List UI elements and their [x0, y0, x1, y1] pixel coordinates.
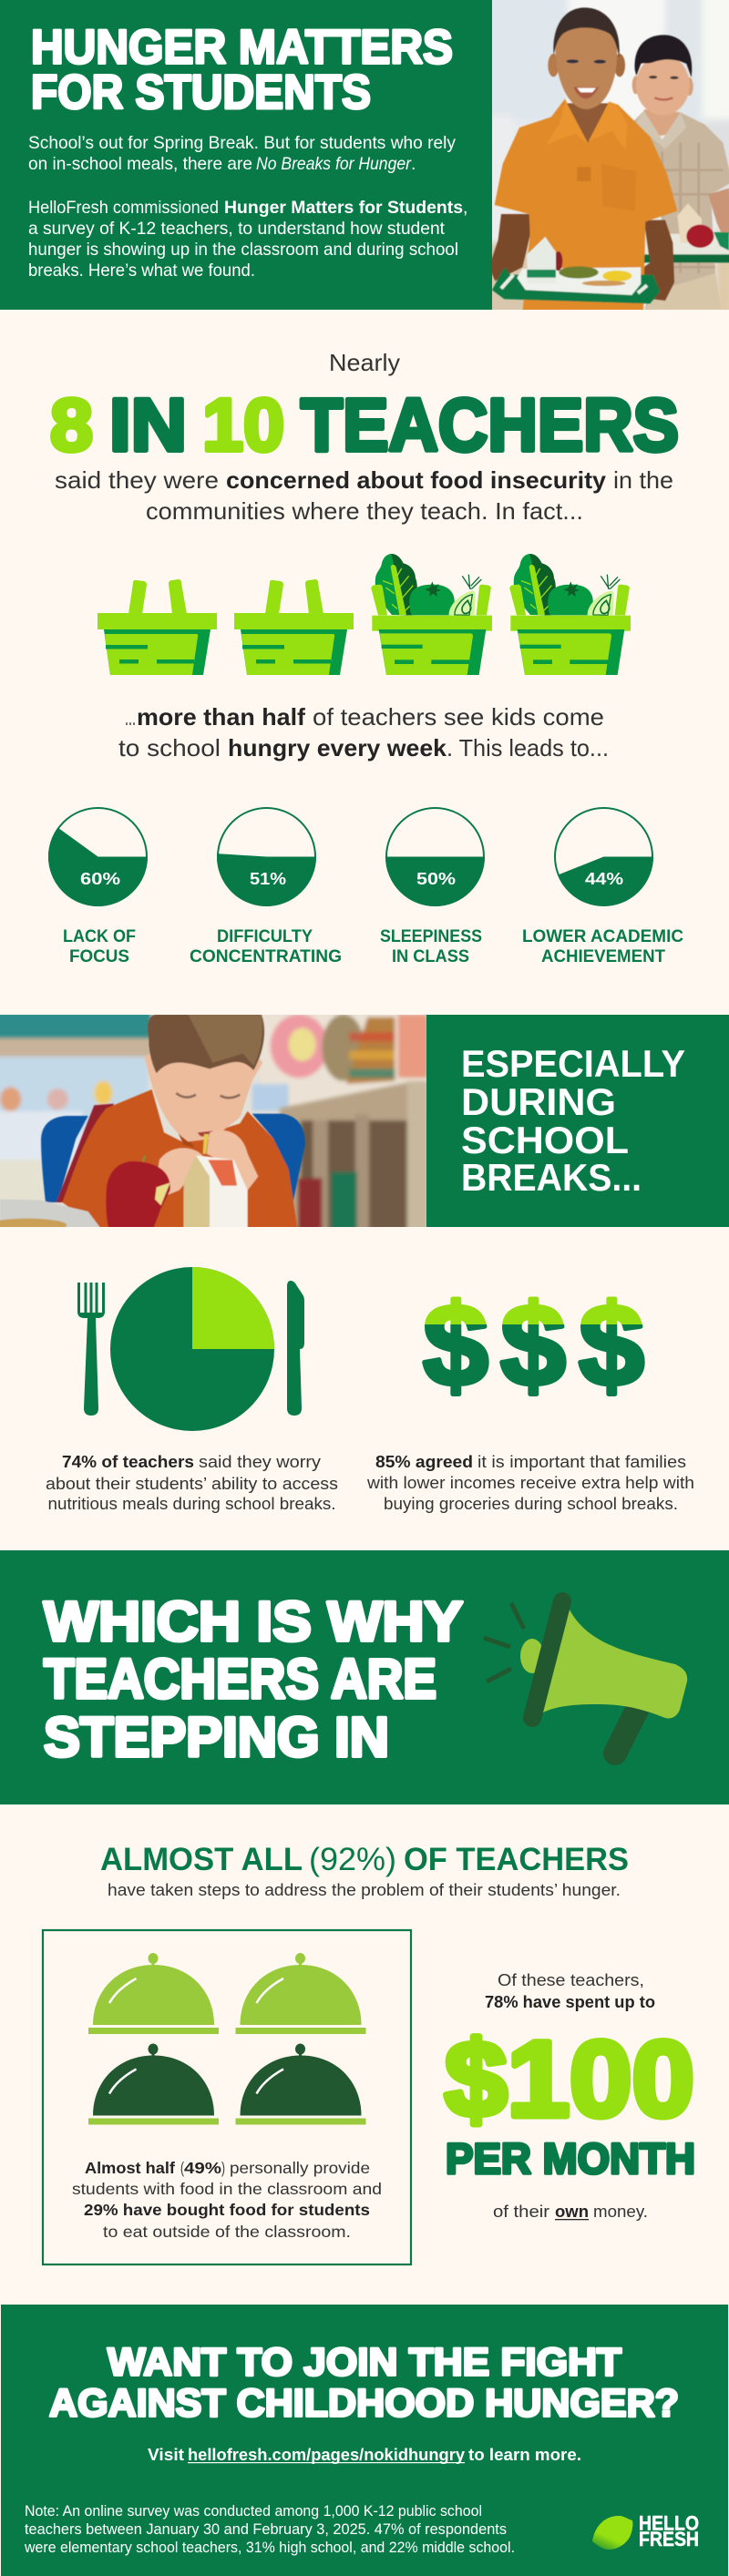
Nearly: Nearly: [329, 349, 400, 376]
survey note: were elementary school teachers, 31% high school, and 22% middle school.: [24, 2540, 515, 2556]
concern sentence: said they were: [55, 466, 219, 494]
icon: three dollar signs: $: [500, 1281, 566, 1411]
pie: 60 percent lack of focus: 60%: [80, 870, 120, 888]
icon: three dollar signs: $: [579, 1281, 644, 1411]
intro paragraph 2: Hunger Matters for Students: [224, 198, 463, 218]
survey note: Note: An online survey was conducted among 1,000 K-12 public school: [25, 2503, 482, 2520]
pie: 44 percent lower academic achievement: LOWER ACADEMIC: [522, 927, 683, 946]
heading: almost all 92 percent of teachers: [100, 1842, 629, 1899]
text: of these teachers: Of these teachers,: [498, 1971, 644, 1989]
heading: STEPPING IN: [44, 1706, 389, 1768]
concern sentence: communities where they teach. In fact...: [146, 497, 583, 525]
intro paragraph 2: breaks. Here’s what we found.: [28, 261, 255, 281]
visit link: to learn more.: [468, 2445, 581, 2464]
heading: almost all 92 percent of teachers: (92%): [309, 1842, 396, 1877]
pie: 44 percent lower academic achievement: ACHIEVEMENT: [541, 947, 665, 966]
photo: boy drinking milk with apple: [0, 1011, 437, 1232]
heading: TEACHERS ARE: [44, 1648, 436, 1710]
icon: empty basket 1: [98, 579, 217, 675]
heading: [44, 1590, 463, 1768]
text: almost half provide food: students with food in the classroom and: [72, 2180, 382, 2198]
knife: [287, 1281, 304, 1416]
text: 74 percent of teachers: said they worry: [199, 1453, 321, 1471]
intro paragraph 1: .: [411, 154, 416, 174]
pie: 60 percent lack of focus: [48, 808, 148, 966]
pie: 60 percent lack of focus: LACK OF: [63, 927, 136, 946]
icon: empty basket 2: [234, 579, 354, 675]
icon: dark cloche 4: [235, 2044, 366, 2124]
text: 85 percent agreed: with lower incomes receive extra help with: [366, 1474, 694, 1492]
big number: $100: [445, 2019, 694, 2140]
logo: HelloFresh: [592, 2512, 699, 2550]
icon: light cloche 1: [88, 1953, 219, 2034]
title: [31, 20, 453, 119]
pie: 51 percent difficulty concentrating: DIFFICULTY: [217, 927, 313, 946]
back boy: [631, 35, 729, 312]
fork: [77, 1283, 105, 1416]
icon: light cloche 2: [235, 1953, 366, 2034]
icon: three dollar signs: [423, 1281, 644, 1411]
intro paragraph 2: a survey of K-12 teachers, to understand how student: [28, 219, 446, 239]
heading: ESPECIALLY: [461, 1042, 685, 1085]
intro paragraph 1: School’s out for Spring Break. But for students who rely: [28, 133, 456, 153]
subheading: have taken steps to address the problem of their students’ hunger.: [108, 1880, 621, 1899]
pie: 44 percent lower academic achievement: 44%: [585, 870, 623, 888]
text: 74 percent of teachers: nutritious meals during school breaks.: [47, 1495, 335, 1513]
text: almost half provide food: Almost half: [85, 2159, 175, 2177]
heading: WANT TO JOIN THE FIGHT: [108, 2341, 621, 2385]
front boy: [489, 7, 677, 312]
text: almost half provide food: to eat outside of the classroom.: [103, 2223, 351, 2241]
pie: 50 percent sleepiness in class: IN CLASS: [392, 947, 469, 966]
text: 85 percent agreed: buying groceries during school breaks.: [384, 1495, 678, 1513]
text: 85 percent agreed: [366, 1453, 694, 1513]
heading: [49, 2341, 679, 2425]
visit link: [148, 2445, 581, 2464]
concern sentence: [55, 466, 673, 525]
heading: BREAKS...: [461, 1156, 642, 1199]
text: 85 percent agreed: 85% agreed: [375, 1453, 473, 1471]
heading: AGAINST CHILDHOOD HUNGER?: [49, 2381, 679, 2425]
hero green background: [0, 0, 492, 310]
big statistic: TEACHERS: [301, 384, 679, 466]
text: almost half provide food: personally provide: [230, 2159, 370, 2177]
more than half sentence: hungry every week: [228, 734, 447, 762]
panel: footer call to action: [1, 2305, 728, 2576]
wordmark: FRESH: [639, 2528, 699, 2550]
more than half sentence: of teachers see kids come: [313, 703, 604, 731]
intro paragraph 2: HelloFresh commissioned: [28, 198, 219, 218]
pie: 60 percent lack of focus: FOCUS: [69, 947, 129, 966]
big statistic: [50, 384, 679, 466]
concern sentence: in the: [613, 466, 673, 494]
big statistic: IN: [109, 384, 187, 466]
text: 85 percent agreed: it is important that families: [477, 1453, 686, 1471]
text: almost half provide food: 49%: [184, 2159, 222, 2177]
text: of their own money: [493, 2203, 648, 2221]
text: almost half provide food: (: [180, 2159, 184, 2177]
wordmark: HELLO: [639, 2512, 699, 2534]
more than half sentence: . This leads to...: [447, 734, 609, 762]
icon: full basket 4: [509, 554, 631, 675]
pie: 51 percent difficulty concentrating: [190, 808, 342, 966]
heading: SCHOOL: [461, 1119, 629, 1161]
visit link: Visit: [148, 2445, 184, 2464]
wordmark: [639, 2512, 699, 2550]
icon: dark cloche 3: [88, 2044, 219, 2124]
chart: four pie gauges: [48, 808, 683, 966]
pie: 50 percent sleepiness in class: [380, 808, 485, 966]
intro paragraph 1: [28, 133, 456, 174]
text: 74 percent of teachers: about their students’ ability to access: [46, 1475, 338, 1493]
more than half sentence: to school: [118, 734, 221, 762]
photo: two boys holding lunch trays: [483, 0, 729, 319]
text: almost half provide food: ): [221, 2159, 225, 2177]
intro paragraph 2: hunger is showing up in the classroom and during school: [28, 240, 458, 260]
concern sentence: concerned about food insecurity: [226, 466, 607, 494]
panel: cloches box: [43, 1930, 411, 2264]
baskets row: [98, 554, 631, 675]
text: of their own money: money.: [593, 2203, 648, 2221]
headline: 8 in 10 teachers: [50, 349, 679, 525]
text: 74 percent of teachers: [46, 1453, 338, 1513]
panel: which is why teachers are stepping in: [0, 1550, 729, 1804]
heading: WHICH IS WHY: [44, 1590, 463, 1652]
visit link: hellofresh.com/pages/nokidhungry: [188, 2445, 466, 2464]
text: almost half provide food: [72, 2159, 382, 2241]
per month: PER MONTH: [446, 2134, 695, 2182]
title: HUNGER MATTERS: [31, 20, 453, 75]
panel: hero: [0, 0, 729, 319]
text: of these teachers: [485, 1971, 655, 2011]
intro paragraph 2: [28, 198, 467, 281]
icon: three dollar signs: $: [423, 1281, 488, 1411]
heading: almost all 92 percent of teachers: ALMOST ALL: [100, 1842, 303, 1877]
pie: 44 percent lower academic achievement: [522, 808, 683, 966]
pie: 50 percent sleepiness in class: SLEEPINESS: [380, 927, 482, 946]
heading: [461, 1042, 685, 1199]
big statistic: 10: [202, 384, 284, 466]
intro paragraph 1: No Breaks for Hunger: [256, 154, 412, 174]
text: of their own money: own: [555, 2203, 589, 2221]
icon: full basket 3: [371, 554, 492, 675]
panel: especially during school breaks: [426, 1015, 729, 1227]
callout: 100 dollars per month: [445, 1971, 695, 2221]
plate: [110, 1267, 274, 1431]
survey note: teachers between January 30 and February 3, 2025. 47% of respondents: [25, 2521, 507, 2538]
survey note: [24, 2503, 515, 2556]
text: almost half provide food: 29% have bought food for students: [84, 2201, 370, 2219]
text: of their own money: of their: [493, 2203, 549, 2221]
intro paragraph 1: on in-school meals, there are: [28, 154, 252, 174]
intro paragraph 2: ,: [463, 198, 467, 218]
pie: 50 percent sleepiness in class: 50%: [416, 870, 456, 888]
icon: plate pie with fork and knife: [77, 1267, 304, 1431]
pie: 51 percent difficulty concentrating: 51%: [250, 870, 286, 888]
more than half sentence: more than half: [137, 703, 305, 731]
pie: 51 percent difficulty concentrating: CONCENTRATING: [190, 947, 342, 966]
text: 74 percent of teachers: 74% of teachers: [62, 1453, 194, 1471]
icon: megaphone: [484, 1601, 687, 1753]
heading: almost all 92 percent of teachers: OF TEACHERS: [404, 1842, 629, 1877]
lime: [592, 2516, 632, 2550]
heading: DURING: [461, 1080, 616, 1123]
more than half sentence: ...: [125, 703, 136, 731]
title: FOR STUDENTS: [31, 66, 371, 119]
text: of these teachers: 78% have spent up to: [485, 1993, 655, 2011]
big statistic: 8: [50, 384, 93, 466]
more than half sentence: [118, 703, 609, 762]
